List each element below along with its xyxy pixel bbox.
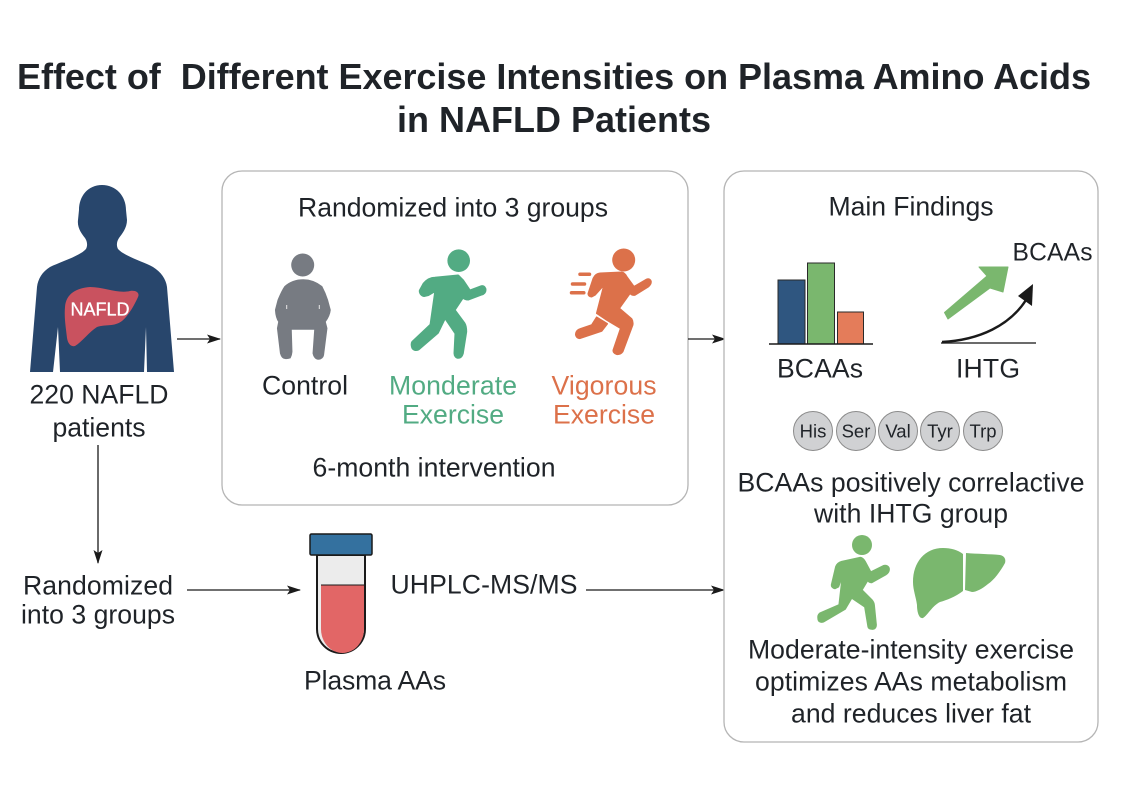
amino acid chips: Trp	[969, 421, 997, 442]
panel heading: Main Findings	[828, 192, 994, 222]
label: moderate exercise	[389, 371, 517, 430]
label: randomized into 3 groups: into 3 groups	[21, 600, 175, 630]
title: Effect of Different Exercise Intensities on Plasma Amino Acids	[17, 56, 1091, 97]
panel heading: Randomized into 3 groups	[298, 193, 608, 223]
amino acid chips	[794, 412, 1002, 450]
finding: BCAAs correlation: with IHTG group	[813, 499, 1008, 529]
label: 220 NAFLD patients	[30, 380, 168, 443]
arrow: groups to findings	[688, 338, 725, 340]
label: 6-month intervention: 6-month intervention	[312, 453, 556, 483]
finding: moderate-intensity exercise: and reduces liver fat	[791, 699, 1032, 729]
icon: green liver	[913, 548, 1005, 618]
amino acid chips: Val	[885, 421, 911, 442]
title	[17, 56, 1091, 140]
label: 220 NAFLD patients: 220 NAFLD	[30, 380, 168, 410]
arrow: randomized to plasma tube	[187, 589, 300, 591]
icon: moderate exercise runner	[412, 249, 485, 357]
icon: green runner	[818, 535, 889, 629]
label: control: Control	[262, 371, 348, 401]
arrow: patients down to randomized	[97, 445, 99, 563]
amino acid chips: Tyr	[927, 421, 953, 442]
label: randomized into 3 groups	[21, 571, 175, 630]
icon: patient silhouette with NAFLD liver	[30, 185, 174, 372]
label: vigorous exercise: Vigorous	[552, 371, 656, 401]
label: randomized into 3 groups: Randomized	[23, 571, 173, 601]
panel: randomized into 3 groups	[222, 171, 688, 505]
icon: vigorous exercise runner	[572, 248, 651, 354]
label: plasma AAs: Plasma AAs	[304, 666, 446, 696]
icon: seated control person	[276, 254, 330, 359]
label: IHTG: IHTG	[956, 354, 1020, 384]
panel: main findings	[724, 171, 1098, 742]
label: BCAAs under chart: BCAAs	[777, 354, 863, 384]
icon: upward green arrow and IHTG curve	[941, 267, 1036, 343]
arrow: UHPLC to findings	[586, 589, 724, 591]
icon: plasma test tube	[310, 534, 372, 653]
finding: moderate-intensity exercise	[748, 635, 1074, 729]
label: 220 NAFLD patients: patients	[52, 413, 146, 443]
finding: BCAAs correlation: BCAAs positively correlactive	[738, 468, 1084, 498]
label: vigorous exercise: Exercise	[553, 400, 655, 430]
arrow: patients to groups	[177, 338, 220, 340]
bar chart: BCAAs	[769, 263, 873, 344]
label: vigorous exercise	[552, 371, 656, 430]
finding: moderate-intensity exercise: optimizes AAs metabolism	[755, 667, 1067, 697]
finding: moderate-intensity exercise: Moderate-intensity exercise	[748, 635, 1074, 665]
label: moderate exercise: Monderate	[389, 371, 517, 401]
amino acid chips: Ser	[842, 421, 870, 442]
amino acid chips: His	[800, 421, 826, 442]
finding: BCAAs correlation	[738, 468, 1084, 529]
icon: patient silhouette with NAFLD liver: NAFLD	[70, 300, 130, 320]
title: in NAFLD Patients	[397, 99, 711, 140]
label: BCAAs beside arrow: BCAAs	[1012, 240, 1092, 267]
label: UHPLC-MS/MS: UHPLC-MS/MS	[390, 570, 578, 600]
label: moderate exercise: Exercise	[402, 400, 504, 430]
